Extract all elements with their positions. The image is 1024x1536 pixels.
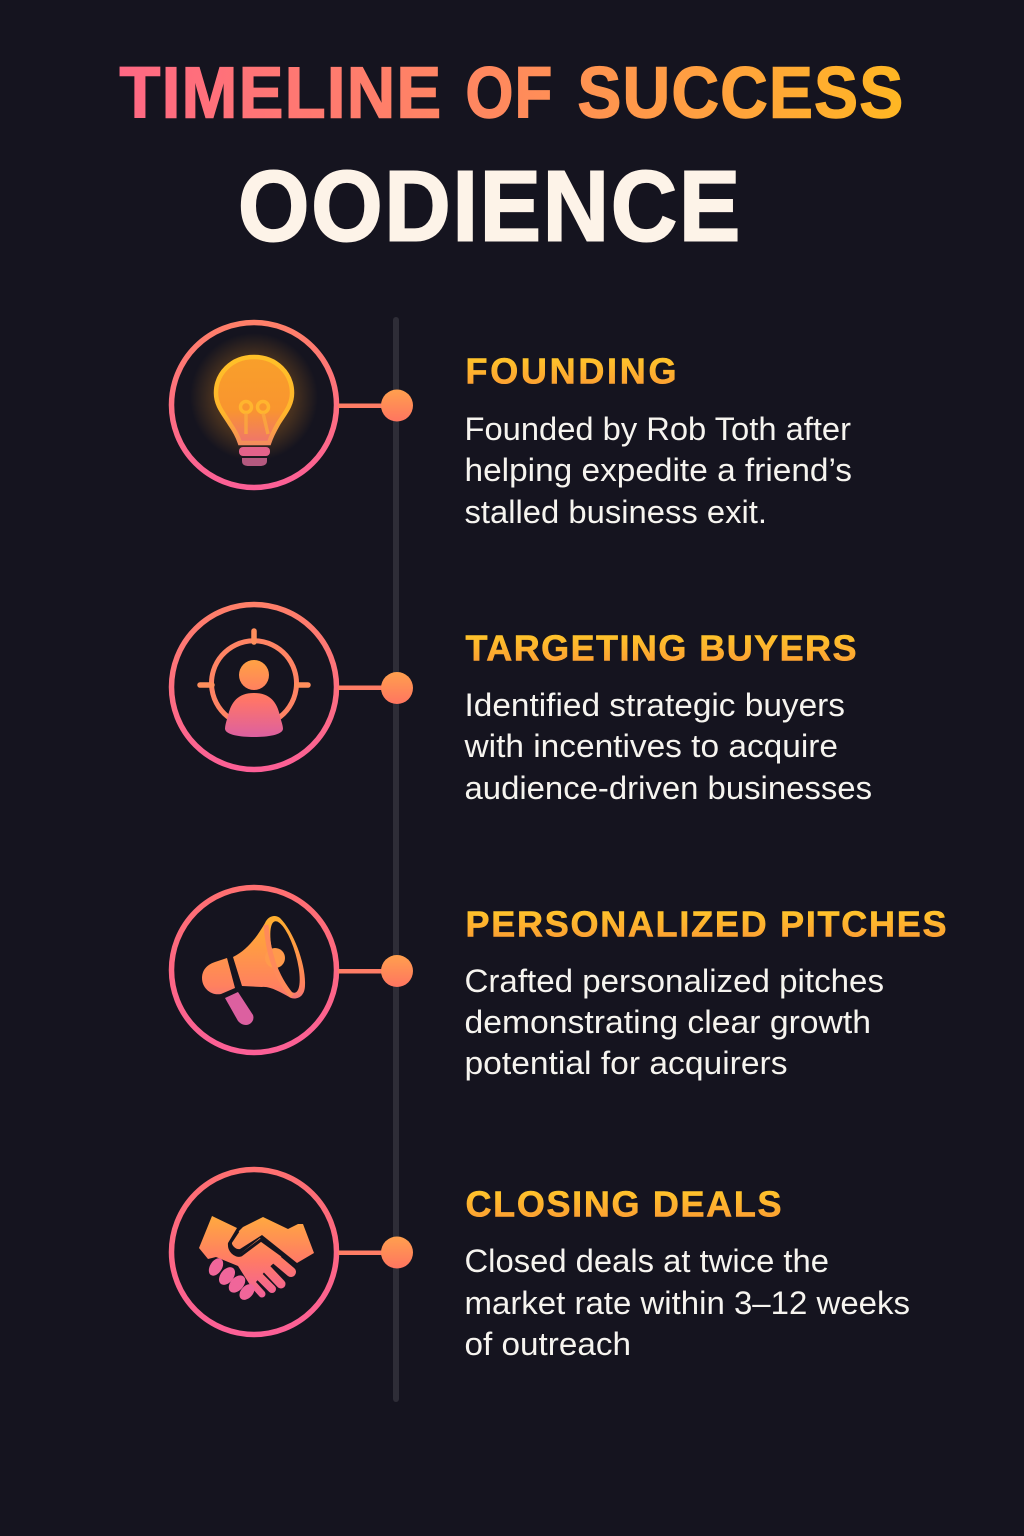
body text: Founded by Rob Toth after (464, 411, 851, 447)
body text: Closed deals at twice the (464, 1243, 829, 1279)
timeline spine (393, 317, 399, 1402)
step 1: founding (172, 322, 852, 530)
body text: potential for acquirers (464, 1045, 788, 1081)
connector and node (338, 1236, 413, 1268)
body text (464, 963, 884, 1081)
heading: founding: FOUNDING (466, 350, 676, 392)
icon: person in target ring (172, 604, 336, 770)
subtitle: brand name: OODIENCE (238, 150, 742, 262)
step 4: closing deals (172, 1170, 910, 1362)
body text: audience-driven businesses (464, 770, 872, 806)
body text: demonstrating clear growth (464, 1004, 871, 1040)
body text: of outreach (464, 1326, 631, 1362)
body text (463, 687, 872, 806)
body text: with incentives to acquire (463, 728, 838, 764)
title: TIMELINE (120, 54, 442, 134)
body text (464, 411, 852, 530)
body text (464, 1243, 910, 1362)
title (120, 54, 904, 134)
body text: stalled business exit. (464, 494, 767, 530)
connector and node (338, 390, 413, 422)
title: SUCCESS (578, 54, 904, 134)
icon: handshake in ring (172, 1170, 336, 1334)
body text: Crafted personalized pitches (464, 963, 884, 999)
connector and node (338, 955, 413, 987)
title: OF (466, 54, 554, 134)
body text: market rate within 3–12 weeks (464, 1285, 910, 1321)
body text: Identified strategic buyers (464, 687, 845, 723)
icon: megaphone in ring (172, 888, 336, 1052)
body text: helping expedite a friend’s (464, 452, 852, 488)
icon: light bulb in ring (172, 322, 336, 488)
step 3: personalized pitches (172, 888, 946, 1081)
step 2: targeting buyers (172, 604, 872, 806)
heading: closing deals: CLOSING DEALS (466, 1184, 782, 1224)
heading: targeting buyers: TARGETING BUYERS (466, 628, 856, 668)
connector and node (338, 672, 413, 704)
heading: personalized pitches: PERSONALIZED PITCHES (466, 904, 946, 944)
